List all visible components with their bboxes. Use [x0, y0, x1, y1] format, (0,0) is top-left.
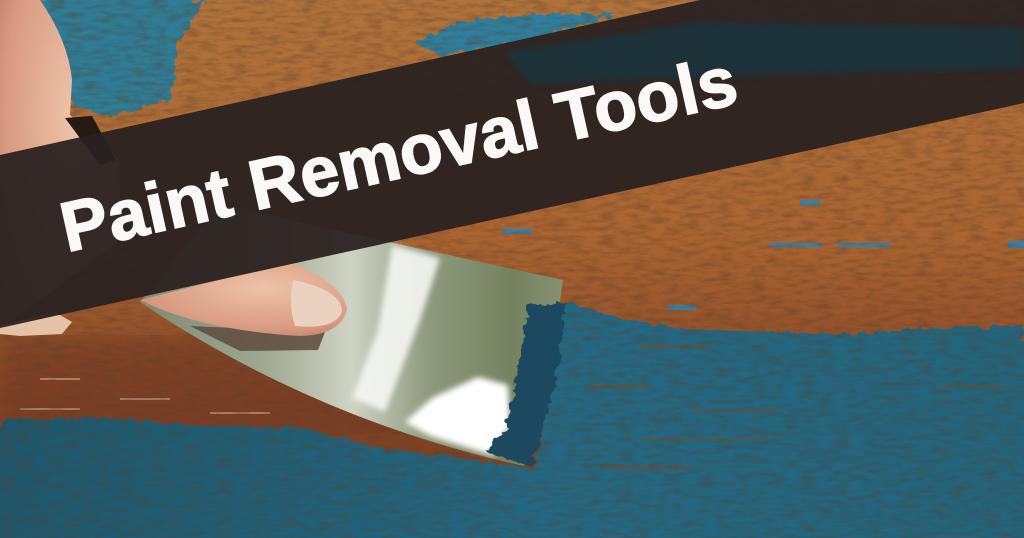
- tool handle: [65, 116, 116, 165]
- blade reflection: [352, 245, 440, 412]
- wood gaps in paint: [590, 345, 1010, 469]
- finger shadow on blade: [190, 326, 325, 351]
- pale wood streaks: [20, 378, 270, 414]
- blade bright patch: [405, 377, 510, 456]
- paint backing to canvas edge: [0, 325, 1024, 538]
- title: Paint Removal Tools: [53, 41, 744, 267]
- dark title band: [0, 0, 1024, 328]
- dark blue streak showing through band: [505, 22, 1024, 84]
- hand: upper fingers: [0, 0, 120, 330]
- thumb: [140, 262, 347, 336]
- lower finger tip: [0, 312, 72, 336]
- small blue flecks on wood: [502, 200, 1024, 310]
- scraped paint clump: [486, 302, 566, 466]
- lower dark wood shading: [0, 335, 520, 435]
- thumbnail: [291, 280, 342, 327]
- top blue paint streak: [414, 14, 618, 56]
- bottom blue paint layer: [0, 302, 1024, 538]
- scraper blade: [140, 205, 563, 466]
- top-left blue paint patch: [34, 0, 205, 116]
